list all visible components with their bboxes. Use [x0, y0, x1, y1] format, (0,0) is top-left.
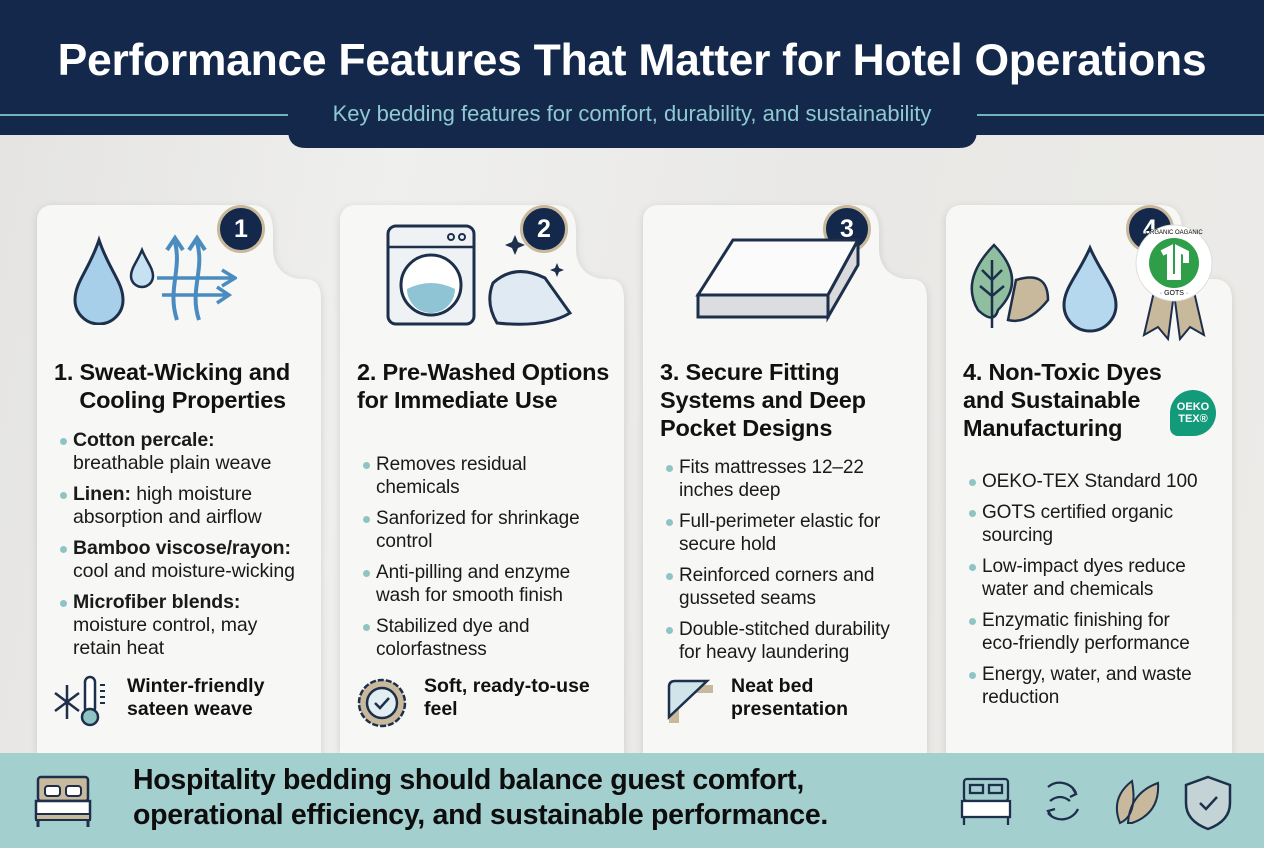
heading 1: 1. Sweat-Wicking and: [54, 359, 290, 385]
bullets 4: OEKO-TEX Standard 100: [982, 471, 1197, 492]
bullets 3: inches deep: [679, 480, 780, 501]
footer message: [133, 764, 828, 831]
heading 4: Manufacturing: [963, 415, 1122, 441]
icon: fitted corner: [668, 680, 713, 723]
badge 2: [520, 205, 568, 253]
bullets 1: Microfiber blends:: [73, 591, 240, 613]
footer note 1: sateen weave: [127, 698, 253, 720]
bullets 4: Energy, water, and waste: [982, 664, 1192, 685]
badge 1: 1: [234, 215, 248, 243]
bullets 2: Removes residual: [376, 454, 526, 475]
footer note 3: presentation: [731, 698, 848, 720]
icon: OEKO-TEX logo: OEKO: [1177, 401, 1209, 413]
heading 4: 4. Non-Toxic Dyes: [963, 359, 1162, 385]
footer note 2: [424, 675, 590, 720]
icon: washing machine and towel: [386, 224, 572, 326]
icon: snowflake thermometer: [54, 676, 105, 726]
bullets 1: cool and moisture-wicking: [73, 560, 295, 582]
heading 1: Cooling Properties: [79, 387, 286, 413]
badge 2: 2: [537, 215, 551, 243]
bullets 4: [969, 471, 1197, 708]
bullets 2: Anti-pilling and enzyme: [376, 562, 570, 583]
icon: mattress: [695, 238, 860, 322]
badge 3: 3: [840, 215, 854, 243]
bullets 3: Full-perimeter elastic for: [679, 511, 880, 532]
icons: footer set: [960, 776, 1232, 830]
badge 4: 4: [1143, 215, 1157, 243]
heading 3: [660, 359, 866, 441]
badge 3: [823, 205, 871, 253]
panel: card 3: [640, 204, 930, 753]
bullets 2: Sanforized for shrinkage: [376, 508, 580, 529]
bullets 3: Fits mattresses 12–22: [679, 457, 864, 478]
bullets 3: [666, 457, 890, 663]
heading 3: Pocket Designs: [660, 415, 832, 441]
bullets 1: absorption and airflow: [73, 506, 262, 528]
panel: card 4: [944, 204, 1234, 753]
bullets 4: eco-friendly performance: [982, 633, 1190, 654]
bullets 4: water and chemicals: [982, 579, 1153, 600]
footer note 2: feel: [424, 698, 458, 720]
icon: check seal: [358, 678, 406, 728]
bullets 2: colorfastness: [376, 639, 487, 660]
footer note 3: [731, 675, 848, 720]
subtitle tab: [0, 101, 1264, 148]
bullets 4: reduction: [982, 687, 1059, 708]
panel: card 1: [34, 204, 324, 753]
heading 1: [54, 359, 290, 413]
bullets 2: control: [376, 531, 432, 552]
icon: OEKO-TEX logo: TEX®: [1178, 413, 1208, 425]
heading 4: and Sustainable: [963, 387, 1140, 413]
heading 3: 3. Secure Fitting: [660, 359, 839, 385]
heading 4: [963, 359, 1162, 441]
bullets 1: breathable plain weave: [73, 452, 271, 474]
bullets 3: secure hold: [679, 534, 776, 555]
icon: GOTS seal: [1136, 224, 1212, 341]
bullets 3: Double-stitched durability: [679, 619, 890, 640]
panel: card 2: [338, 204, 626, 753]
bullets 2: wash for smooth finish: [376, 585, 563, 606]
title: Performance Features That Matter for Hotel Operations: [58, 36, 1206, 85]
heading 2: [357, 359, 609, 413]
bullets 1: moisture control, may: [73, 614, 257, 636]
heading 3: Systems and Deep: [660, 387, 866, 413]
header band: [0, 0, 1264, 135]
bullets 2: chemicals: [376, 477, 460, 498]
bullets 3: Reinforced corners and: [679, 565, 874, 586]
bullets 3: for heavy laundering: [679, 642, 849, 663]
badge 1: [217, 205, 265, 253]
bullets 1: retain heat: [73, 637, 164, 659]
icon: leaves and drop: [970, 243, 1118, 332]
icon: bed: [34, 776, 92, 827]
bullets 2: Stabilized dye and: [376, 616, 529, 637]
bullets 4: sourcing: [982, 525, 1053, 546]
bullets 4: Enzymatic finishing for: [982, 610, 1170, 631]
bullets 3: gusseted seams: [679, 588, 816, 609]
bullets 1: Linen: high moisture: [73, 483, 252, 505]
bullets 1: Cotton percale:: [73, 429, 215, 451]
footer note 2: Soft, ready-to-use: [424, 675, 590, 697]
icon: GOTS seal: · GOTS ·: [1160, 290, 1188, 297]
icon: OEKO-TEX logo: [1170, 390, 1216, 436]
footer band: [0, 753, 1264, 848]
footer note 3: Neat bed: [731, 675, 813, 697]
footer note 1: [127, 675, 264, 720]
footer note 1: Winter-friendly: [127, 675, 264, 697]
subtitle tab: Key bedding features for comfort, durability, and sustainability: [333, 101, 931, 126]
bullets 4: Low-impact dyes reduce: [982, 556, 1186, 577]
footer message: operational efficiency, and sustainable performance.: [133, 799, 828, 831]
icon: water drops and airflow: [74, 234, 237, 325]
footer message: Hospitality bedding should balance guest comfort,: [133, 764, 804, 796]
badge 4: [1126, 205, 1174, 253]
bullets 4: GOTS certified organic: [982, 502, 1173, 523]
heading 2: for Immediate Use: [357, 387, 557, 413]
bullets 1: Bamboo viscose/rayon:: [73, 537, 291, 559]
bullets 1: [60, 429, 295, 659]
bullets 2: [363, 454, 580, 660]
icon: GOTS seal: ORGANIC OAGANIC: [1145, 230, 1203, 236]
heading 2: 2. Pre-Washed Options: [357, 359, 609, 385]
